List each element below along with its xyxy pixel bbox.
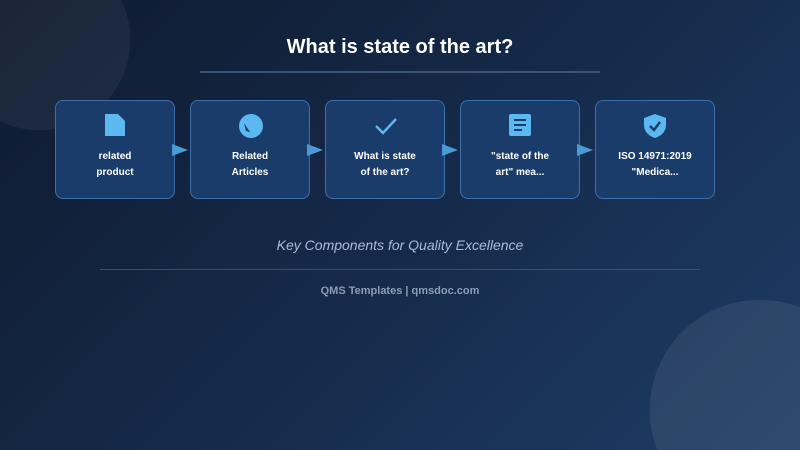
arrow 1 <box>172 144 188 156</box>
arrow 2 <box>307 144 323 156</box>
footer: QMS Templates | qmsdoc.com <box>321 285 479 297</box>
card 5: ISO 14971: ISO 14971:2019 <box>618 151 692 162</box>
card 2: Related Articles: Articles <box>232 167 268 178</box>
card 4: state of the art meaning: "state of the <box>491 151 549 162</box>
card 2: Related Articles <box>190 100 310 199</box>
card 4: state of the art meaning <box>460 100 580 199</box>
card 2: Related Articles: Related <box>232 151 268 162</box>
subtitle: Key Components for Quality Excellence <box>277 237 523 253</box>
arrow 4 <box>577 144 593 156</box>
card 4: state of the art meaning: art" mea... <box>496 167 544 178</box>
card 5: ISO 14971 <box>595 100 715 199</box>
title: What is state of the art? <box>287 36 513 58</box>
arrow 3 <box>442 144 458 156</box>
card 3: What is state of the art <box>325 100 445 199</box>
card 3: What is state of the art: of the art? <box>361 167 409 178</box>
card 1: related product: related <box>99 151 131 162</box>
card 5: ISO 14971: "Medica... <box>632 167 678 178</box>
card 1: related product: product <box>96 167 134 178</box>
card 3: What is state of the art: What is state <box>354 151 416 162</box>
card 1: related product <box>55 100 175 199</box>
